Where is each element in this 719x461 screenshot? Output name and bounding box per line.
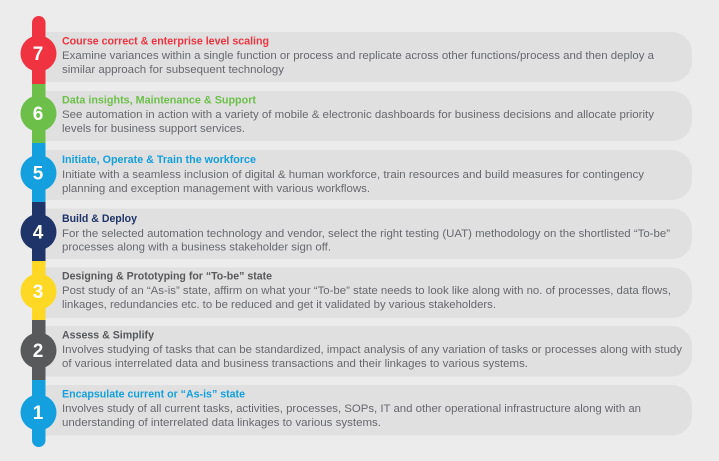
- heading: step 3: Designing & Prototyping for “To-be” state: [62, 270, 272, 282]
- text block: step 1: [62, 403, 641, 429]
- text block: step 5: Initiate with a seamless inclusion of digital & human workforce, train resources and build measures for contingency: [62, 169, 644, 181]
- heading: step 7: Course correct & enterprise level scaling: [62, 36, 269, 48]
- panel: step 6 data insights: [45, 91, 692, 141]
- text block: step 1: Involves study of all current tasks, activities, processes, SOPs, IT and other operational infrastructure along with an: [62, 403, 641, 415]
- text block: step 7: Examine variances within a single function or process and replicate across other functions/process and then deploy a: [62, 50, 655, 62]
- node: 2: [20, 320, 56, 380]
- text block: step 6: levels for business support services.: [62, 123, 245, 135]
- text block: step 3: [62, 285, 671, 311]
- panel: step 2 assess and simplify: [45, 326, 692, 376]
- text block: step 6: See automation in action with a variety of mobile & electronic dashboards for business decisions and allocate priority: [62, 109, 654, 121]
- text block: step 4: processes along with a business stakeholder sign off.: [62, 242, 331, 254]
- heading: step 6: Data insights, Maintenance & Support: [62, 94, 256, 106]
- text block: step 2: of various interrelated data and business transactions and their linkages to various systems.: [62, 358, 528, 370]
- node: 7: [20, 16, 56, 84]
- text block: step 3: Post study of an “As-is” state, affirm on what your “To-be” state needs to look like along with no. of processes, data flows,: [62, 285, 671, 297]
- text block: step 7: [62, 50, 655, 76]
- node: 2: 2: [33, 341, 43, 362]
- panel: step 4 build and deploy: [45, 208, 692, 259]
- node: 3: [20, 261, 56, 320]
- heading: step 1: Encapsulate current or “As-is” state: [62, 388, 245, 400]
- text block: step 4: For the selected automation technology and vendor, select the right testing (UAT) methodology on the shortlisted “To-be”: [62, 228, 670, 240]
- text block: step 4: [62, 228, 670, 254]
- text block: step 1: understanding of interrelated data linkages to various systems.: [62, 417, 381, 429]
- text block: step 5: [62, 169, 644, 195]
- heading: step 2: Assess & Simplify: [62, 330, 155, 342]
- node: 3: 3: [33, 282, 43, 303]
- node: 6: 6: [33, 104, 43, 125]
- timeline spine with numbered nodes: [20, 16, 56, 447]
- node: 7: 7: [33, 44, 43, 65]
- node: 6: [20, 84, 56, 143]
- node: 1: 1: [33, 403, 44, 424]
- text block: step 3: linkages, redundancies etc. to be reduced and get it validated by various stakeholders.: [62, 299, 496, 311]
- heading: step 5: Initiate, Operate & Train the workforce: [62, 154, 256, 166]
- text block: step 2: [62, 344, 682, 370]
- panel: step 1 encapsulate current state: [45, 385, 692, 436]
- node: 5: 5: [33, 164, 44, 184]
- panel: step 7 course correct: [45, 32, 692, 82]
- node: 5: [20, 143, 56, 202]
- text block: step 6: [62, 109, 654, 135]
- node: 1: [20, 380, 56, 447]
- heading: step 4: Build & Deploy: [62, 213, 138, 225]
- text block: step 5: planning and exception management with various workflows.: [62, 183, 370, 195]
- node: 4: [20, 202, 56, 261]
- text block: step 2: Involves studying of tasks that can be standardized, impact analysis of any variation of tasks or processes along with study: [62, 344, 682, 356]
- node: 4: 4: [33, 222, 44, 244]
- panel: step 3 designing and prototyping: [45, 268, 692, 318]
- text block: step 7: similar approach for subsequent technology: [62, 64, 284, 76]
- panel: step 5 initiate operate train: [45, 150, 692, 200]
